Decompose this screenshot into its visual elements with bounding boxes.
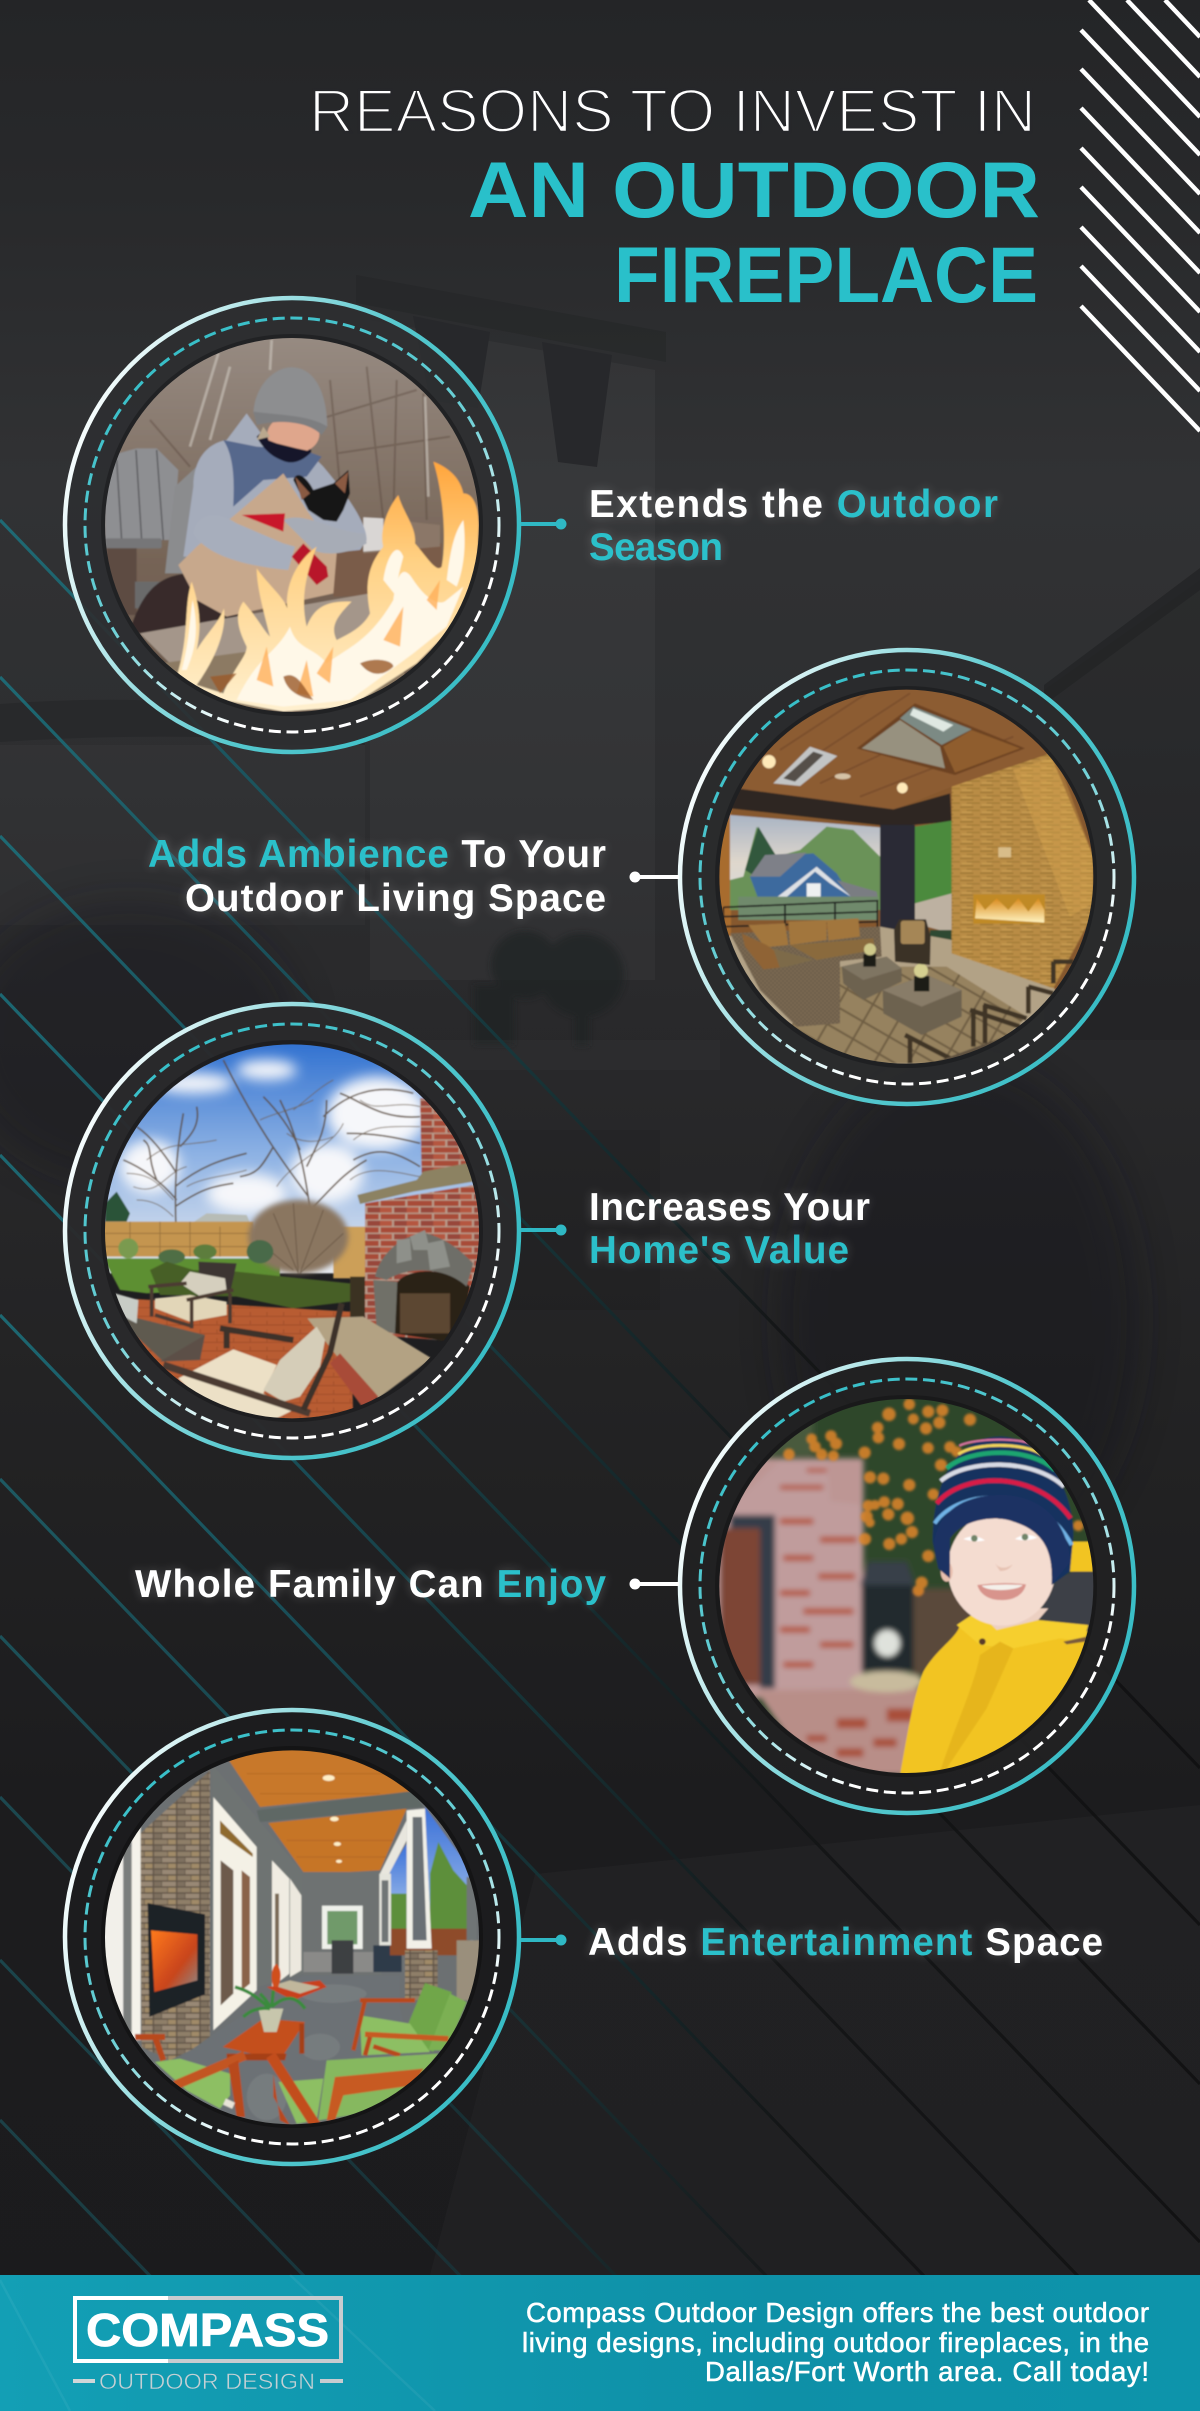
fire table bbox=[140, 593, 370, 663]
connector 2 bbox=[630, 872, 679, 882]
label 5: Adds Entertainment Space bbox=[588, 1921, 1103, 1964]
footer bar bbox=[0, 2275, 1200, 2411]
label 3: Home's Value bbox=[589, 1229, 849, 1272]
beam bbox=[720, 788, 952, 827]
foreground chairs bbox=[905, 962, 1073, 1063]
side wall bbox=[212, 1764, 303, 2000]
woman bbox=[132, 574, 238, 634]
left column + sky bbox=[719, 810, 731, 943]
bushes and grass bbox=[103, 1258, 280, 1293]
column and greenery bbox=[880, 825, 915, 937]
floor bbox=[177, 1975, 427, 2120]
patio bbox=[123, 1298, 353, 1420]
brick fireplace bbox=[420, 1098, 483, 1177]
ring frame 5 bbox=[65, 1710, 519, 2164]
ceiling bbox=[220, 1747, 427, 1807]
item 3: increases home value bbox=[65, 1004, 870, 1458]
connector 1 bbox=[521, 518, 566, 530]
photo: covered patio with stone fireplace bbox=[713, 683, 1100, 1070]
footer text bbox=[522, 2297, 1149, 2387]
photo: covered porch with green chairs bbox=[100, 1740, 487, 2134]
photo: backyard with brick fireplace bbox=[100, 1040, 487, 1420]
sky and trees bbox=[425, 1807, 473, 1947]
connector 4 bbox=[630, 1578, 679, 1590]
adirondack chair bbox=[105, 448, 200, 615]
footer text: living designs, including outdoor fireplaces, in the bbox=[522, 2327, 1149, 2358]
label 3 bbox=[589, 1186, 870, 1272]
back wall bbox=[303, 1872, 382, 1975]
diagonal background lines bbox=[0, 520, 1200, 2411]
table bbox=[223, 2019, 305, 2060]
item 4: whole family can enjoy bbox=[135, 1359, 1134, 1813]
label 2: Outdoor Living Space bbox=[185, 877, 606, 920]
deck rail bbox=[333, 543, 442, 597]
sofa bbox=[730, 927, 882, 1027]
chair front bbox=[160, 1303, 342, 1420]
item 2: adds ambience bbox=[148, 650, 1134, 1104]
bokeh lights bbox=[783, 1399, 1084, 1596]
hearth bbox=[307, 1317, 432, 1398]
label 2: Adds Ambience To Your bbox=[148, 833, 606, 876]
label 3: Increases Your bbox=[589, 1186, 870, 1229]
label 1 bbox=[589, 483, 998, 569]
ring frame 3 bbox=[65, 1004, 519, 1458]
title: REASONS TO INVEST IN bbox=[309, 77, 1036, 145]
footer text: Compass Outdoor Design offers the best outdoor bbox=[526, 2297, 1149, 2328]
white corner stripes bbox=[1081, 0, 1200, 431]
title: FIREPLACE bbox=[614, 230, 1038, 319]
railing bbox=[722, 899, 880, 928]
item 1: extends the outdoor season bbox=[65, 298, 998, 752]
fence bbox=[103, 1222, 253, 1257]
logo: COMPASS bbox=[86, 2304, 329, 2356]
title bbox=[309, 77, 1040, 319]
connector 5 bbox=[521, 1934, 566, 1946]
fireplace bbox=[148, 1903, 205, 2017]
footer text: Dallas/Fort Worth area. Call today! bbox=[705, 2356, 1149, 2387]
ceiling bbox=[713, 683, 1100, 817]
ring frame 4 bbox=[680, 1359, 1134, 1813]
lounger and plant bbox=[267, 1980, 327, 2000]
logo bbox=[73, 2298, 343, 2394]
title: AN OUTDOOR bbox=[468, 145, 1040, 234]
ring frame 1 bbox=[65, 298, 519, 752]
label 1: Extends the Outdoor bbox=[589, 483, 998, 526]
boy hat bbox=[933, 1437, 1073, 1585]
flames bbox=[177, 462, 479, 712]
boy coat bbox=[900, 1612, 1090, 1778]
label 2 bbox=[148, 833, 606, 920]
label 4: Whole Family Can Enjoy bbox=[135, 1563, 607, 1606]
dog bbox=[293, 470, 350, 522]
photo: smiling boy in yellow coat bbox=[713, 1388, 1100, 1782]
stone wall bbox=[952, 753, 1093, 988]
label 1: Season bbox=[589, 526, 723, 569]
doors bbox=[213, 1797, 257, 2030]
blue house bbox=[750, 852, 850, 898]
connector 3 bbox=[521, 1224, 566, 1236]
tables bbox=[842, 966, 902, 1000]
ring frame 2 bbox=[680, 650, 1134, 1104]
glass table bbox=[125, 1315, 205, 1362]
green chairs bbox=[353, 1983, 467, 2055]
photo: woman with dog at fire pit bbox=[100, 333, 487, 720]
floor bbox=[729, 926, 1056, 1064]
stone wall bbox=[140, 1770, 210, 2060]
boy face bbox=[975, 1608, 1048, 1630]
item 5: adds entertainment space bbox=[65, 1710, 1103, 2164]
armchair bbox=[894, 919, 931, 965]
chair back bbox=[148, 1262, 237, 1328]
logo: OUTDOOR DESIGN bbox=[99, 2369, 315, 2394]
columns bbox=[380, 1820, 407, 1875]
